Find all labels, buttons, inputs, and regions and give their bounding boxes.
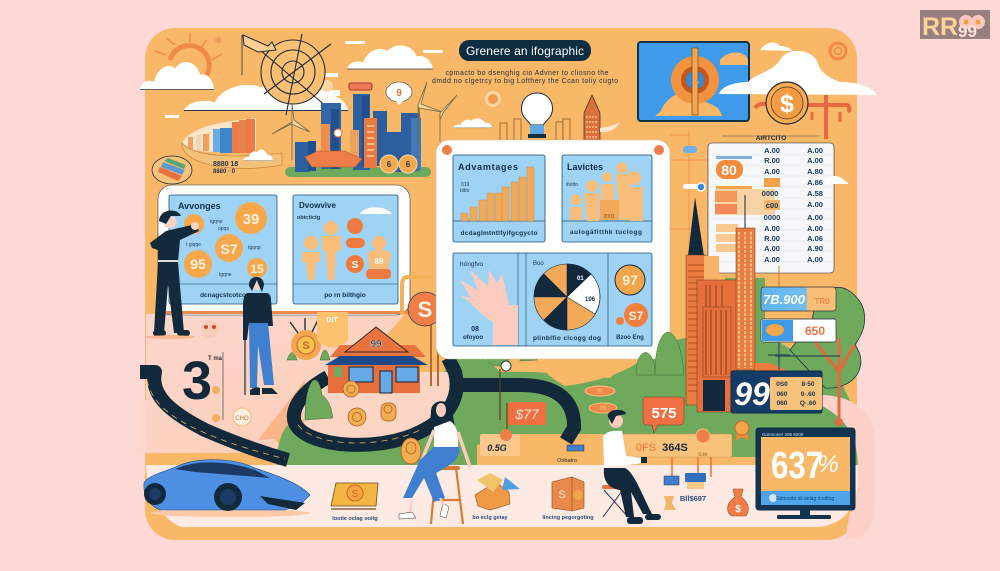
- navy score panel 99: 0·.60: [801, 391, 816, 398]
- city skyline: [285, 83, 431, 177]
- panel: left advantages board: [158, 185, 410, 315]
- table: A.00: [764, 167, 780, 176]
- navy score panel 99: 060: [777, 391, 788, 398]
- watermark logo: RR: [922, 13, 958, 41]
- navy score panel 99: 99: [734, 376, 770, 412]
- navy score panel 99: Q·.60: [800, 400, 817, 407]
- table: R.00: [764, 234, 780, 243]
- subtitle text: dmdd no clgetrcy to big Lofthery the Ccan toliy cugto: [432, 78, 618, 85]
- small clouds: [165, 41, 443, 118]
- card: Advamtages bar chart: bitto: [460, 188, 470, 194]
- card: Lavictes people: aulogãfitthk tuclogg: [570, 229, 642, 236]
- open box icon and label: [472, 473, 520, 521]
- card: Advamtages bar chart: dcdaglmtntlfyifgcgycto: [460, 230, 538, 237]
- curved bar chart: [182, 118, 282, 175]
- navy score panel 99: 8·50: [801, 381, 815, 388]
- orange ground wedge: [258, 380, 305, 440]
- table: A.00: [764, 244, 780, 253]
- paint palette badge: [152, 156, 192, 184]
- card: Avvonges: t giqqe: [186, 242, 201, 248]
- green hills: [433, 330, 862, 467]
- orange crate and label: lincing pegorgoting: [542, 515, 594, 521]
- burst coin: [290, 318, 321, 360]
- lower left pink ground: [146, 314, 405, 453]
- card: Advamtages bar chart: [453, 155, 545, 242]
- card: Avvonges: opqs: [218, 226, 229, 232]
- red connector under table: [778, 266, 780, 287]
- card: bottom row with hand, pie, stats: Boo: [533, 261, 544, 267]
- tree round mid: [485, 340, 537, 420]
- sun top left: [155, 33, 222, 80]
- speech sign 575: 575: [651, 405, 677, 422]
- speech bubble: 9: [396, 88, 402, 99]
- orange lower band: [477, 434, 758, 467]
- light bulb with pillars: [500, 93, 570, 152]
- large tree right: [790, 287, 865, 426]
- small box icon and label: [557, 445, 584, 464]
- label bar with values: 364S: [662, 442, 688, 454]
- card: Avvonges: 95: [190, 256, 206, 272]
- blue stand icons: [664, 473, 706, 489]
- value box 7B.900: 7B.900: [763, 292, 806, 307]
- label 0.56: 0.5G: [487, 443, 507, 453]
- card: bottom row with hand, pie, stats: Bzoo Eng: [616, 335, 644, 341]
- label bar with values: [620, 429, 732, 458]
- card: Avvonges: S7: [220, 241, 238, 257]
- peach interior of road: [304, 372, 453, 441]
- card: Lavictes people: Lavictes: [567, 162, 603, 172]
- award ribbon: [735, 421, 749, 441]
- oval price tags: [585, 386, 617, 413]
- table: [708, 135, 834, 273]
- coin sign on pole: [408, 292, 442, 386]
- card: bottom row with hand, pie, stats: 08: [471, 326, 479, 333]
- navy score panel 99: 0S0: [776, 381, 788, 388]
- quote bubble: CHO: [235, 416, 249, 422]
- big cloud top right: [719, 51, 877, 95]
- table: A.06: [807, 234, 823, 243]
- table: A.00: [807, 200, 823, 209]
- small box icon and label: Oribatro: [557, 458, 577, 464]
- table: A.86: [807, 178, 823, 187]
- card: Avvonges: 15: [250, 262, 264, 276]
- card: Dvowvive: S: [352, 260, 359, 271]
- title pill: [459, 40, 591, 61]
- card: bottom row with hand, pie, stats: [453, 253, 652, 346]
- card: Avvonges: Avvonges: [178, 201, 221, 211]
- card: Lavictes people: ifiotto: [566, 182, 578, 188]
- speech bubble: [386, 82, 412, 105]
- sky window with coin: $: [691, 72, 699, 88]
- card: Dvowvive: Dvowvive: [299, 201, 336, 210]
- curved bar chart: 8880 · 0: [213, 169, 236, 175]
- cloud small top right: [760, 43, 792, 51]
- value box 650: 650: [805, 324, 825, 338]
- subtitle text: [432, 70, 618, 85]
- navy score panel 99: [731, 371, 822, 413]
- road right: [462, 385, 574, 441]
- table: A.00: [764, 224, 780, 233]
- legs and small stands: [672, 457, 711, 477]
- small medallion: [485, 91, 501, 107]
- card: Dvowvive: [293, 195, 398, 304]
- winding road dashes: [298, 425, 420, 443]
- winding road middle: [294, 358, 457, 445]
- table: 0000: [762, 189, 778, 198]
- plane icon: [242, 35, 276, 75]
- open box icon and label: bo eclg getay: [472, 515, 509, 521]
- table: R.00: [764, 156, 780, 165]
- table: A.90: [807, 244, 823, 253]
- monitor with big percent: [756, 428, 855, 519]
- coins on ground: [343, 381, 421, 464]
- price sign 577: [507, 402, 546, 432]
- money bag: [728, 489, 748, 516]
- card: Dvowvive: obtctictg: [297, 215, 320, 221]
- hand illustration: [460, 270, 509, 345]
- table: A.00: [807, 255, 823, 264]
- brick tower: [584, 95, 620, 150]
- pie chart: [534, 264, 600, 330]
- wind turbines: [272, 82, 457, 160]
- card: Avvonges: tgqne: [219, 272, 232, 278]
- main orange board: [145, 28, 857, 540]
- stat coin S7: [624, 303, 648, 327]
- card: bottom row with hand, pie, stats: 97: [622, 272, 638, 288]
- price sign 577: $77: [514, 406, 540, 422]
- bag and price tag: Bll$697: [680, 494, 706, 503]
- woman on stool: [399, 401, 470, 524]
- stat coin 97: [615, 265, 645, 295]
- monitor with big percent: Gomnoner 205 9200: [762, 432, 804, 437]
- card: Lavictes people: 2001: [603, 214, 615, 220]
- cloud right of city: [453, 118, 492, 128]
- red sign post: [755, 95, 849, 139]
- card: Lavictes people: [562, 155, 652, 242]
- card: Dvowvive: po rn bilthgio: [324, 292, 366, 299]
- target ring decoration: [830, 43, 846, 59]
- table: 80: [721, 162, 737, 178]
- city skyline: 6: [406, 160, 411, 169]
- small cloud on chart: [243, 150, 273, 161]
- card: bottom row with hand, pie, stats: hóngfvo: [460, 261, 484, 268]
- bracket connector: [402, 277, 432, 315]
- card: bottom row with hand, pie, stats: plinblfio clcogg dog: [533, 335, 601, 342]
- coin sign on pole: S: [418, 297, 432, 322]
- small tag and node: [683, 146, 705, 191]
- road centre dashes left: [147, 380, 285, 459]
- diy tag: [317, 312, 348, 348]
- orange crate and label: [542, 477, 594, 521]
- card: bottom row with hand, pie, stats: 01: [577, 276, 584, 282]
- navy score panel 99: 060: [777, 400, 788, 407]
- table overlay cloud: [825, 176, 848, 184]
- watermark logo: 99: [958, 22, 977, 41]
- bushes near house: [287, 350, 333, 420]
- car: [144, 460, 310, 517]
- house with coin sign: 99: [370, 339, 382, 350]
- value box 7B.900: TR0: [814, 297, 830, 306]
- gold dollar coin: $: [780, 90, 794, 118]
- quote bubble: [233, 408, 251, 426]
- table: A.00: [807, 224, 823, 233]
- label bar with values: 0FS: [636, 442, 656, 454]
- small posts: [768, 342, 840, 370]
- table: 0000: [764, 213, 780, 222]
- table: A.00: [807, 156, 823, 165]
- city skyline: 6: [387, 160, 392, 169]
- brick towers right: [686, 195, 790, 412]
- man at chair: [602, 410, 661, 524]
- card: Avvonges: [169, 195, 277, 304]
- pink right lower panel: [820, 395, 875, 540]
- step number 3: 3: [182, 351, 212, 411]
- card: Avvonges: dcnagcstcotco: [200, 292, 246, 299]
- person with cane: [243, 277, 278, 395]
- burst coin: S: [302, 340, 310, 352]
- speech sign 575: [643, 397, 684, 433]
- watermark logo: [920, 10, 990, 41]
- card: Avvonges: tgqne: [210, 219, 223, 225]
- table: ċ00: [766, 201, 778, 210]
- label 0.56: [480, 429, 520, 456]
- connector lines from table: [670, 130, 708, 360]
- cloud top centre: [347, 45, 433, 69]
- radar target circles: [260, 34, 331, 115]
- cash stack icon and label: S: [352, 489, 359, 500]
- table: A.00: [764, 146, 780, 155]
- road left: [140, 372, 288, 460]
- value box 650: [761, 319, 836, 342]
- sign pole with label: [208, 352, 223, 422]
- panel: centre board: [436, 140, 670, 359]
- label bar with values: 0.to: [698, 452, 708, 458]
- table: A.00: [764, 255, 780, 264]
- gold dollar coin: [766, 82, 808, 124]
- table: A.00: [807, 213, 823, 222]
- bushes below centre board: [636, 332, 684, 375]
- money bag: $: [735, 504, 741, 515]
- diy tag: DIT: [326, 317, 338, 324]
- cloud top left: [140, 62, 214, 90]
- cash stack icon and label: [331, 483, 378, 522]
- card: Avvonges: 39: [243, 211, 259, 228]
- sky window with coin: [638, 42, 749, 121]
- cash stack icon and label: lootie oclag ooitg: [332, 516, 378, 522]
- large cloud left: [184, 80, 348, 110]
- orange ground patch: [535, 359, 640, 386]
- card: Dvowvive: 89: [375, 257, 384, 266]
- subtitle text: cpmacto bo dsenghig cio Advner to cliosno the: [446, 70, 609, 77]
- sign pole with label: T ma: [208, 356, 223, 362]
- value box 7B.900: [761, 287, 836, 311]
- monitor with big percent: Gttnnodo oli anlag d.odtog: [776, 496, 835, 502]
- orange baseline: [158, 311, 408, 314]
- bag and price tag: [664, 494, 706, 510]
- table: A.00: [807, 146, 823, 155]
- table: A.58: [807, 189, 823, 198]
- card: Advamtages bar chart: 019: [461, 182, 470, 188]
- title pill: Grenere an ifographic: [466, 44, 584, 58]
- card: Avvonges: tgqnp: [248, 245, 261, 251]
- card: Advamtages bar chart: Advamtages: [458, 162, 518, 172]
- house with coin sign: [325, 327, 428, 393]
- left edge pink strip: [135, 400, 146, 453]
- card: bottom row with hand, pie, stats: 106: [585, 297, 596, 303]
- bottom pale strip panel: [146, 465, 858, 527]
- person pointing at board: [145, 211, 199, 339]
- card: bottom row with hand, pie, stats: ofoyoo: [463, 335, 483, 341]
- oval price tags: 90: [597, 389, 604, 395]
- smile badge: [201, 320, 219, 338]
- curved bar chart: 8880 18: [213, 161, 238, 168]
- green left of winding road: [277, 400, 470, 466]
- monitor with big percent: 637: [771, 445, 823, 487]
- card: bottom row with hand, pie, stats: S7: [629, 309, 644, 323]
- oval price tags: 09: [600, 406, 607, 412]
- table: A.80: [807, 167, 823, 176]
- monitor with big percent: %: [817, 451, 839, 478]
- table: AIRTCITO: [756, 135, 786, 142]
- orange crate and label: S: [558, 489, 566, 501]
